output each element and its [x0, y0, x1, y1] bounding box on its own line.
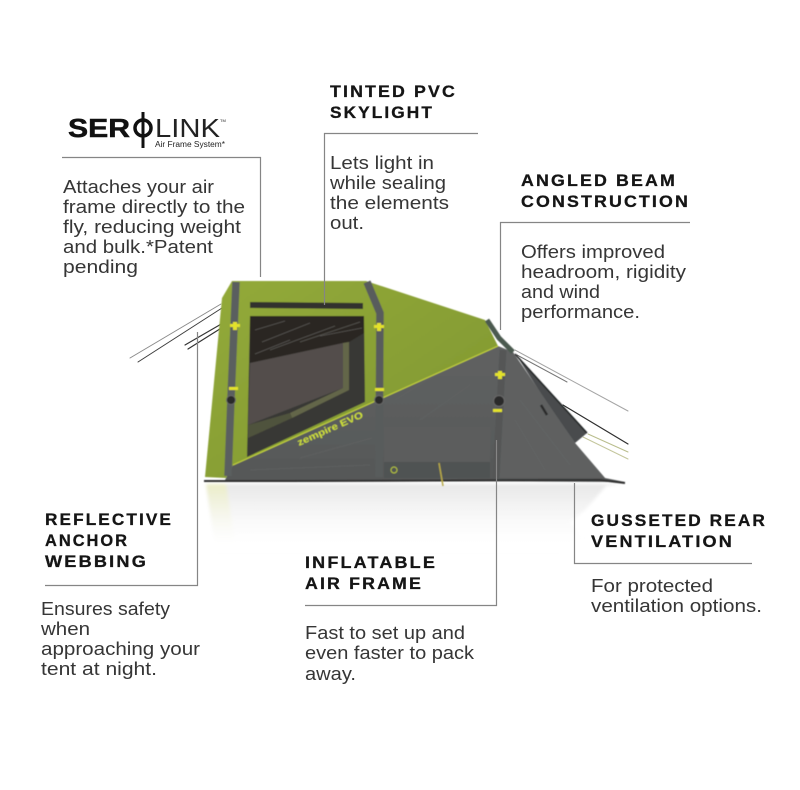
- heading: angled beam construction: ANGLED BEAM: [521, 172, 677, 190]
- text block: serolink: fly, reducing weight: [63, 216, 241, 237]
- leader: serolink: [62, 158, 260, 277]
- logo ring: [135, 112, 151, 148]
- heading: tinted pvc skylight: SKYLIGHT: [330, 104, 434, 122]
- text block: gusseted vent: ventilation options.: [591, 595, 762, 616]
- heading: reflective anchor webbing: ANCHOR: [45, 532, 129, 550]
- text block: skylight: Lets light in: [330, 152, 434, 173]
- text block: angled beam: [521, 241, 687, 322]
- window upper dark: [250, 316, 364, 363]
- rear dark panel: [515, 353, 587, 443]
- heading: reflective anchor webbing: WEBBING: [45, 553, 148, 571]
- rear vent slit: [541, 405, 547, 415]
- copyright badge: [391, 467, 397, 473]
- heading: tinted pvc skylight: [330, 83, 457, 122]
- logo: serolink: LINK: [155, 113, 221, 143]
- text block: reflective webbing: Ensures safety: [41, 598, 171, 619]
- text block: angled beam: headroom, rigidity: [521, 261, 687, 282]
- floor reflection: [206, 484, 622, 552]
- text block: serolink: pending: [63, 256, 138, 277]
- leader: angled beam: [500, 222, 690, 330]
- leader lines: [45, 134, 752, 606]
- leader: inflatable frame: [305, 440, 496, 606]
- air beam middle: [367, 282, 380, 477]
- text block: reflective webbing: tent at night.: [41, 658, 157, 679]
- lower door panel: [384, 427, 491, 462]
- heading: reflective anchor webbing: [45, 511, 173, 571]
- text block: skylight: the elements: [330, 192, 449, 213]
- window: [247, 316, 365, 457]
- text block: angled beam: and wind: [521, 281, 600, 302]
- text block: skylight: while sealing: [329, 172, 446, 193]
- text block: serolink: and bulk.*Patent: [63, 236, 213, 257]
- valve loops: [226, 396, 504, 406]
- logo: serolink: SER: [68, 113, 130, 143]
- text block: reflective webbing: [40, 598, 200, 679]
- heading: inflatable air frame: INFLATABLE: [305, 554, 437, 572]
- text block: angled beam: performance.: [521, 301, 640, 322]
- window interior floor: [248, 343, 343, 425]
- zempire logo on tent: zempire EVO: [296, 410, 365, 449]
- tent photo: [130, 281, 628, 552]
- text block: serolink: [63, 176, 245, 277]
- window top reflections: [255, 321, 362, 354]
- text block: gusseted vent: [591, 575, 762, 616]
- grey lower fly: [225, 346, 625, 482]
- heading: gusseted rear ventilation: VENTILATION: [591, 533, 734, 551]
- text block: serolink: Attaches your air: [63, 176, 214, 197]
- green fly: [205, 281, 498, 478]
- air beam rear: [487, 320, 513, 352]
- leader: skylight: [324, 134, 478, 305]
- peg strap: [439, 463, 443, 486]
- heading: gusseted rear ventilation: [591, 512, 767, 551]
- rear grey panel: [495, 350, 605, 478]
- leader: gusseted vent: [574, 483, 752, 564]
- heading: angled beam construction: [521, 172, 690, 211]
- guy lines: [130, 304, 628, 459]
- text block: inflatable frame: Fast to set up and: [305, 622, 465, 643]
- heading: tinted pvc skylight: TINTED PVC: [330, 83, 457, 101]
- text block: skylight: [329, 152, 449, 233]
- fabric wrinkles: [250, 372, 570, 470]
- heading: gusseted rear ventilation: GUSSETED REAR: [591, 512, 767, 530]
- heading: inflatable air frame: AIR FRAME: [305, 575, 423, 593]
- air beam left: [228, 282, 236, 476]
- heading: reflective anchor webbing: REFLECTIVE: [45, 511, 173, 529]
- logo: serolink: [68, 112, 226, 149]
- text block: angled beam: Offers improved: [521, 241, 665, 262]
- text block: inflatable frame: [305, 622, 475, 684]
- yellow crosses and clips: [229, 322, 505, 412]
- window green strip: [290, 342, 349, 418]
- text block: reflective webbing: when: [40, 618, 90, 639]
- text block: serolink: frame directly to the: [63, 196, 245, 217]
- text block: skylight: out.: [330, 212, 364, 233]
- text block: inflatable frame: even faster to pack: [305, 642, 475, 663]
- skylight: [250, 302, 363, 309]
- heading: inflatable air frame: [305, 554, 437, 593]
- logo: serolink: Air Frame System*: [155, 140, 225, 149]
- logo: serolink: TM: [220, 118, 226, 123]
- heading: angled beam construction: CONSTRUCTION: [521, 193, 690, 211]
- leader: reflective webbing: [45, 332, 198, 586]
- text block: gusseted vent: For protected: [591, 575, 713, 596]
- base line: [204, 480, 625, 483]
- text block: reflective webbing: approaching your: [41, 638, 200, 659]
- yellow seam: [233, 346, 498, 465]
- text block: inflatable frame: away.: [305, 663, 356, 684]
